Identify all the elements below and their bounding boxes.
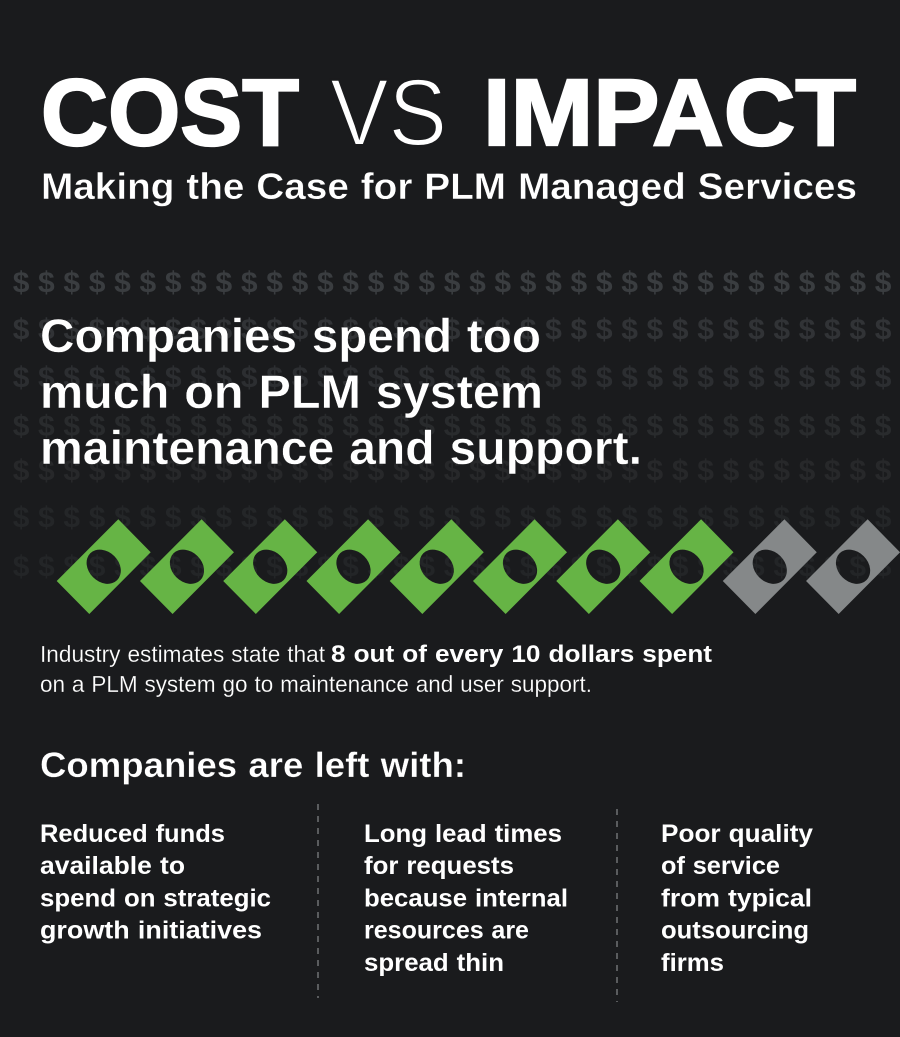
- divider 1: [317, 804, 319, 998]
- column 2: long lead times: resources are: [364, 916, 529, 944]
- icon: green bill 3: [223, 519, 317, 614]
- dollar sign pattern background: $$$$$$$$$$$$$$$$$$$$$$$$$$$$$$$$$$$: [13, 502, 900, 534]
- column 1: reduced funds: Reduced funds: [40, 820, 225, 848]
- dollar sign pattern background: $$$$$$$$$$$$$$$$$$$$$$$$$$$$$$$$$$$: [13, 454, 900, 488]
- statistic text block: Industry estimates state that: [40, 641, 325, 667]
- headline: much on PLM system: [40, 365, 543, 418]
- headline: Companies spend too: [40, 309, 541, 362]
- icon: green bill 5: [390, 519, 484, 614]
- title: IMPACT: [483, 60, 856, 166]
- column 3: poor quality: of service: [661, 852, 780, 880]
- dollar sign pattern background: $$$$$$$$$$$$$$$$$$$$$$$$$$$$$$$$$$$: [13, 410, 900, 443]
- dollar sign pattern background: $$$$$$$$$$$$$$$$$$$$$$$$$$$$$$$$$$$: [13, 550, 900, 584]
- statistic text block: on a PLM system go to maintenance and user support.: [40, 671, 592, 697]
- headline: [40, 309, 642, 474]
- dollar sign pattern background: $$$$$$$$$$$$$$$$$$$$$$$$$$$$$$$$$$$: [13, 362, 900, 394]
- column 1: reduced funds: available to: [40, 852, 185, 880]
- column 3: poor quality: from typical: [661, 884, 812, 912]
- title: COST: [41, 60, 299, 166]
- icon: green bill 4: [306, 519, 400, 614]
- column 3: poor quality: firms: [661, 949, 724, 977]
- dollar bills: 8 of 10 green: [57, 519, 900, 614]
- divider 2: [616, 809, 618, 1002]
- title: VS: [330, 60, 447, 166]
- headline: maintenance and support.: [40, 421, 642, 474]
- statistic text block: [40, 641, 712, 697]
- column 3: poor quality: outsourcing: [661, 916, 809, 944]
- subtitle: Making the Case for PLM Managed Services: [41, 166, 857, 207]
- dollar sign pattern background: [13, 266, 900, 584]
- column 2: long lead times: [364, 820, 568, 977]
- icon: green bill 7: [556, 519, 650, 614]
- column 2: long lead times: for requests: [364, 852, 514, 880]
- title: [41, 60, 856, 166]
- column 1: reduced funds: spend on strategic: [40, 884, 271, 912]
- icon: grey bill 10: [806, 519, 900, 614]
- icon: green bill 6: [473, 519, 567, 614]
- icon: green bill 8: [640, 519, 734, 614]
- column 1: reduced funds: growth initiatives: [40, 916, 262, 944]
- dollar sign pattern background: $$$$$$$$$$$$$$$$$$$$$$$$$$$$$$$$$$$: [13, 314, 900, 346]
- column 2: long lead times: because internal: [364, 884, 568, 912]
- column 3: poor quality: [661, 820, 813, 977]
- column 2: long lead times: Long lead times: [364, 820, 562, 848]
- column 2: long lead times: spread thin: [364, 949, 504, 977]
- icon: grey bill 9: [723, 519, 817, 614]
- column 3: poor quality: Poor quality: [661, 820, 813, 848]
- section heading: Companies are left with:: [40, 746, 466, 785]
- dollar sign pattern background: $$$$$$$$$$$$$$$$$$$$$$$$$$$$$$$$$$$: [13, 266, 900, 300]
- icon: green bill 1: [57, 519, 151, 614]
- icon: green bill 2: [140, 519, 234, 614]
- statistic text block: 8 out of every 10 dollars spent: [331, 641, 712, 668]
- column 1: reduced funds: [40, 820, 271, 944]
